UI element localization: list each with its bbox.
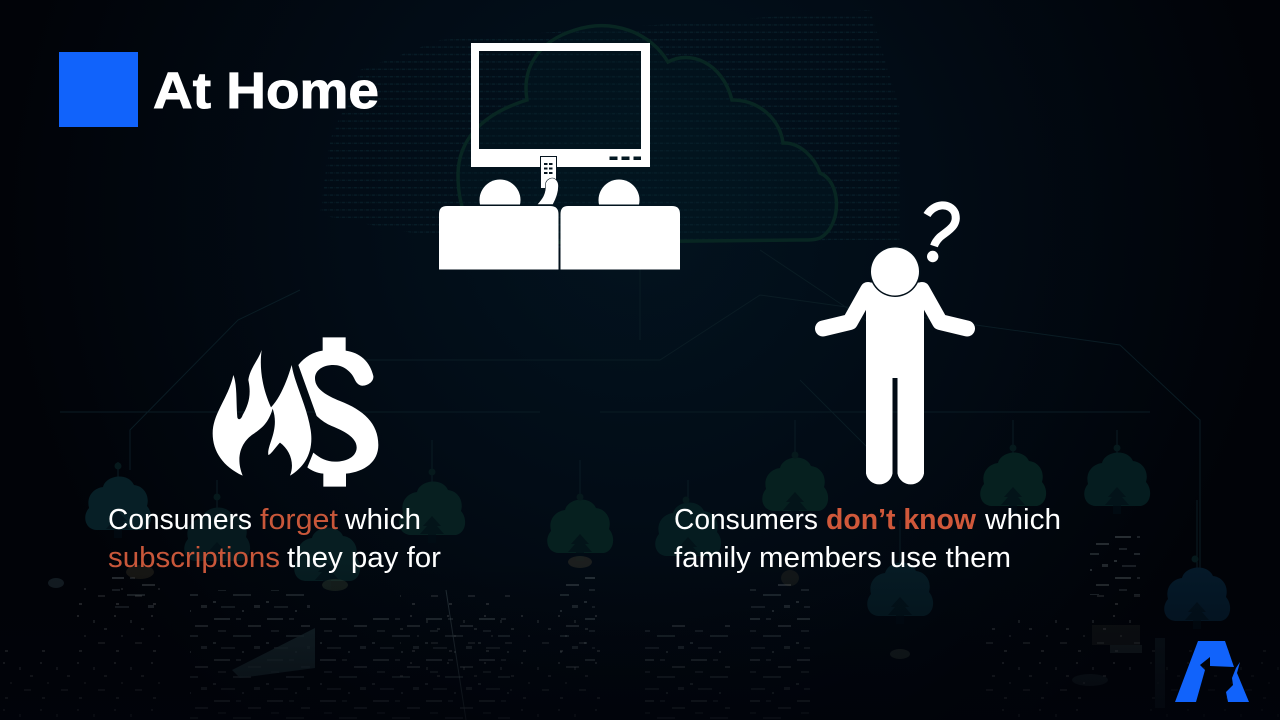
question mark: [927, 205, 956, 262]
caption: family usage: [674, 504, 1061, 574]
left person head: [480, 180, 520, 204]
neck gap: [870, 246, 920, 297]
caption: forgotten subscriptions: forget: [260, 504, 338, 536]
raised arm: [537, 178, 558, 204]
icon: confused person: [823, 205, 967, 484]
caption: family usage: which: [984, 504, 1061, 536]
head: [871, 248, 919, 296]
dollar sign: [298, 337, 378, 487]
television: [471, 43, 650, 167]
small clouds: [85, 444, 1230, 629]
caption: family usage: family members use them: [674, 542, 1011, 574]
large cloud outline: [458, 26, 836, 243]
right person head: [598, 180, 640, 204]
icon: burning money: [213, 337, 378, 487]
caption: forgotten subscriptions: which: [344, 504, 421, 536]
circuit lines: [60, 250, 1200, 573]
caption: forgotten subscriptions: [108, 504, 442, 574]
arms and shoulders: [823, 290, 967, 328]
remote control: [540, 156, 556, 188]
city skyline: [0, 535, 1280, 720]
flame: [213, 350, 311, 476]
icon: couple watching TV: [439, 43, 680, 270]
logo: [1175, 641, 1249, 702]
caption: family usage: Consumers: [674, 504, 818, 536]
caption: forgotten subscriptions: Consumers: [108, 504, 252, 536]
torso and legs: [866, 282, 924, 484]
caption: forgotten subscriptions: they pay for: [287, 542, 442, 574]
caption: forgotten subscriptions: subscriptions: [108, 542, 280, 574]
title: At Home: [153, 62, 379, 119]
section marker: blue square: [59, 52, 138, 127]
left sofa seat: [439, 206, 558, 270]
caption: family usage: don’t know: [826, 504, 977, 536]
right sofa seat: [560, 206, 680, 270]
binary data field: [320, 10, 900, 250]
